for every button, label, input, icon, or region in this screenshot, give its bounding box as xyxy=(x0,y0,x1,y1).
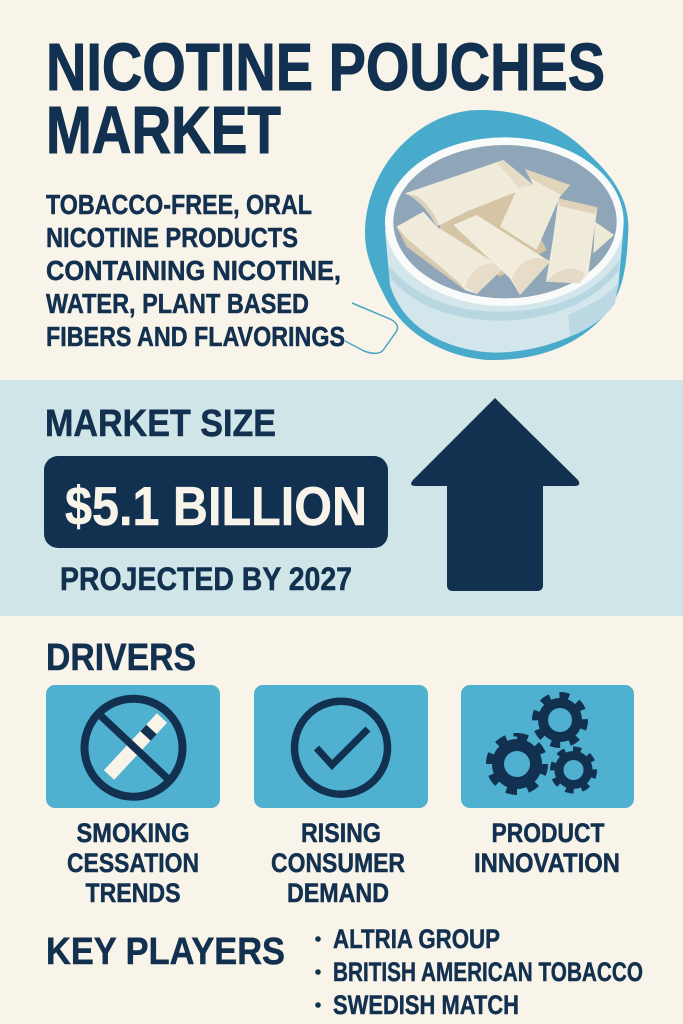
callout: market value: $5.1 BILLION xyxy=(65,475,367,537)
subtitle description: FIBERS AND FLAVORINGS xyxy=(46,321,345,352)
panel: rising consumer demand: CONSUMER xyxy=(271,848,405,878)
arrow: upward growth xyxy=(411,398,579,591)
icon: string loop xyxy=(345,303,398,353)
subtitle description xyxy=(46,189,345,352)
callout: market value xyxy=(44,456,388,548)
panel: product innovation: PRODUCT xyxy=(492,818,605,848)
subtitle description: WATER, PLANT BASED xyxy=(46,288,309,319)
panel: rising consumer demand: DEMAND xyxy=(287,878,389,908)
heading: key players: KEY PLAYERS xyxy=(46,931,285,973)
list: key players: SWEDISH MATCH xyxy=(333,990,519,1020)
icon: pouch tin illustration xyxy=(365,110,628,360)
panel: rising consumer demand: RISING xyxy=(301,818,381,848)
list: key players xyxy=(315,924,643,1020)
panel: product innovation: INNOVATION xyxy=(474,848,620,878)
icon: no smoking xyxy=(84,699,182,797)
subtitle description: CONTAINING NICOTINE, xyxy=(46,255,341,286)
panel: product innovation xyxy=(461,685,634,878)
icon: check mark xyxy=(294,701,388,794)
subtitle description: TOBACCO-FREE, ORAL xyxy=(46,189,312,220)
panel: smoking cessation trends xyxy=(46,685,220,908)
panel: smoking cessation trends: SMOKING xyxy=(76,818,190,848)
title: MARKET xyxy=(46,93,281,168)
pouches xyxy=(397,160,614,295)
heading: market size: MARKET SIZE xyxy=(45,403,276,445)
panel: smoking cessation trends: CESSATION xyxy=(67,848,199,878)
heading: drivers: DRIVERS xyxy=(46,637,196,679)
list: key players: ALTRIA GROUP xyxy=(333,924,500,954)
panel: smoking cessation trends: TRENDS xyxy=(86,878,180,908)
subtitle description: NICOTINE PRODUCTS xyxy=(46,222,298,253)
icon: gears xyxy=(490,696,594,792)
text: projected by 2027: PROJECTED BY 2027 xyxy=(60,561,352,597)
title xyxy=(46,30,605,168)
panel: rising consumer demand xyxy=(254,685,428,908)
market size band xyxy=(0,380,683,616)
